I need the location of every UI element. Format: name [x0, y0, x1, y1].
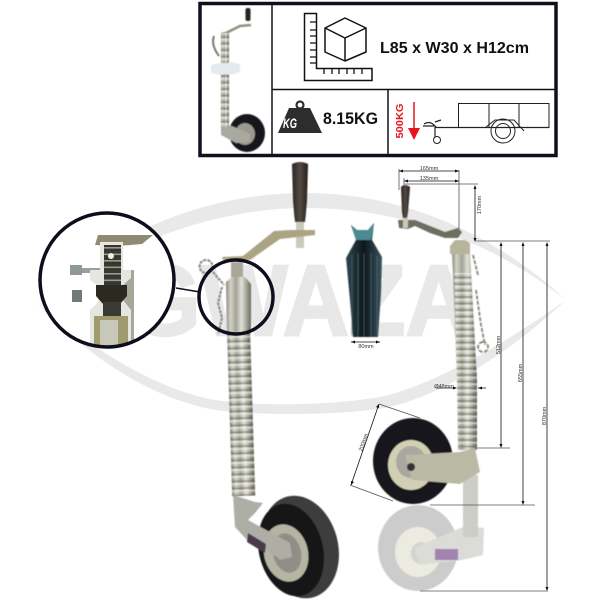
callout connector: [176, 288, 200, 292]
dimension lines: [350, 169, 550, 591]
crank arm: [222, 230, 315, 260]
dimension labels: 165mm: [420, 166, 439, 172]
dimension labels: [358, 166, 548, 452]
watermark: GWAZA eye logo: GWAZA: [129, 245, 472, 357]
wheel rim: [258, 520, 314, 586]
fork bracket: [233, 495, 292, 560]
watermark: GWAZA eye logo: [37, 193, 566, 414]
crank arm: [398, 220, 462, 238]
front view of wheel: [346, 223, 382, 337]
dimensioned jockey wheel: [373, 185, 488, 591]
handle stem: [403, 218, 408, 228]
icon: small jockey wheel photo: [211, 8, 265, 152]
icon: cube: [325, 18, 366, 61]
chain: [473, 255, 488, 352]
icon: weight: KG: [283, 115, 297, 131]
tube ridges: [454, 272, 477, 448]
dimension labels: 80mm: [358, 344, 374, 350]
faded lower wheel: [378, 505, 484, 591]
dimension labels: 170mm: [477, 195, 483, 214]
dimension labels: 135mm: [420, 176, 439, 182]
icon: trailer: [423, 104, 549, 144]
handle stem: [296, 222, 304, 248]
dimension labels: 655mm: [518, 363, 524, 382]
dimensions text: L85 x W30 x H12cm: [380, 40, 529, 57]
main jockey wheel: [200, 162, 349, 600]
weight text: 8.15KG: [323, 110, 378, 128]
spec panel: [200, 4, 556, 156]
icon: ruler: [304, 14, 372, 80]
callout: magnified detail: [40, 213, 174, 350]
dimension labels: 512mm: [496, 335, 502, 354]
screw top: [231, 262, 243, 278]
warning label: [247, 533, 266, 553]
dimension labels: 200mm: [358, 433, 370, 452]
handle grip: [292, 162, 308, 222]
collar: [226, 277, 251, 332]
faded label: [435, 549, 458, 560]
callout: small ring: [199, 260, 273, 334]
icon: weight: [278, 102, 322, 133]
collar: [450, 240, 470, 254]
dimension labels: 870mm: [542, 406, 548, 425]
lower post: [463, 475, 478, 537]
wheel tyre: [251, 487, 349, 600]
upper wheel tyre: [373, 418, 453, 504]
corrugated tube: [227, 330, 255, 496]
dimension labels: Ø48mm: [434, 384, 454, 390]
tube: [452, 252, 477, 450]
chain: [200, 260, 224, 334]
towball load label: 500KG: [394, 104, 406, 138]
dimension arrowheads: [351, 170, 548, 591]
upper wheel rim: [388, 440, 434, 490]
handle grip: [401, 185, 410, 218]
arrow: downward load: [408, 102, 420, 140]
bracket arm: [405, 448, 480, 484]
